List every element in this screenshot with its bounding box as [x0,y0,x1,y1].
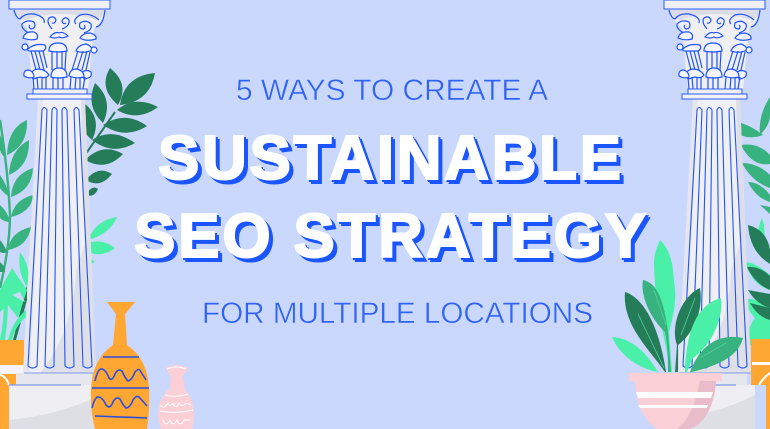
title: seo strategy: SEO STRATEGY [134,202,646,271]
medium green leaves [738,97,770,214]
right orange pot [751,339,770,429]
medium green fern [0,120,33,288]
left plants [0,68,158,340]
bright plant in left pot [0,252,28,340]
potted plant [612,240,743,429]
plant leaves [612,240,743,372]
right column [664,0,765,429]
dark green leaves [747,225,770,320]
title: sustainable: SUSTAINABLE [158,124,621,193]
pink pot [635,381,716,429]
bright leaves behind right column [744,218,770,345]
left column [9,0,110,429]
pink vase [158,365,194,429]
left orange pot [0,340,24,429]
heading line: 5 ways to create a: 5 WAYS TO CREATE A [236,74,548,107]
orange vase [91,302,149,429]
dark green fern [80,68,158,196]
subheading: for multiple locations: FOR MULTIPLE LOCATIONS [202,297,593,330]
bright leaves right of column [88,217,117,264]
right background plants [738,97,770,345]
